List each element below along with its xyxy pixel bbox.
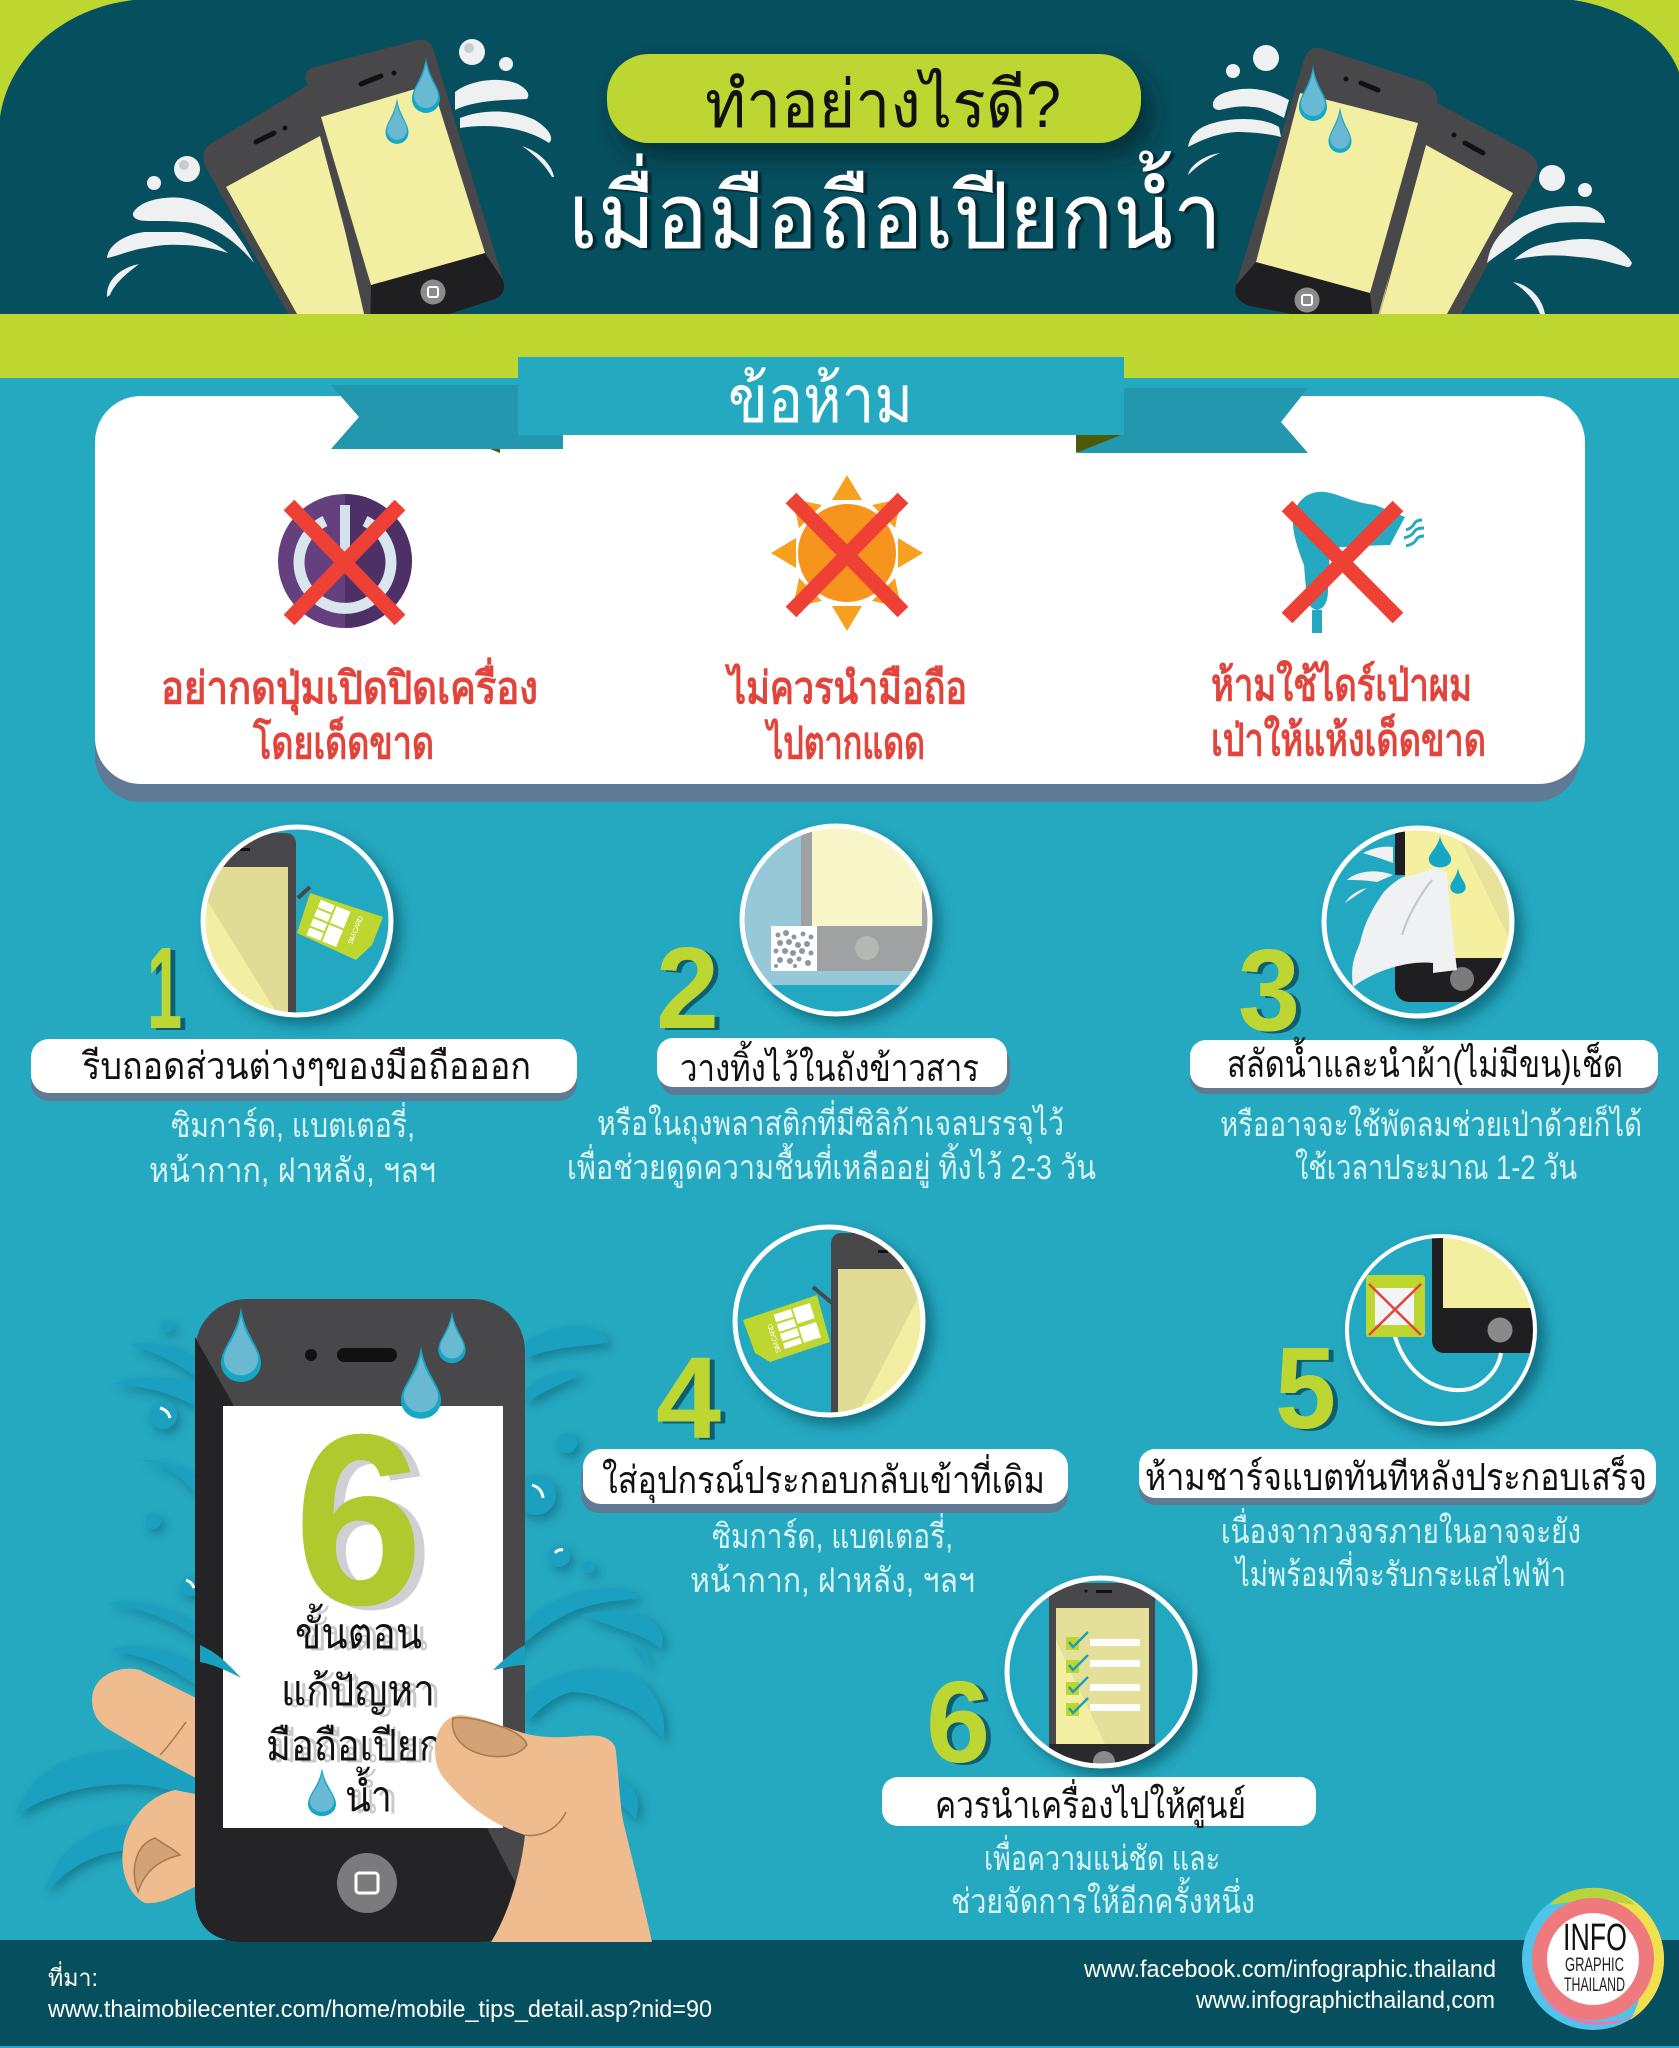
step 2 description: หรือในถุงพลาสติกที่มีซิลิก้าเจลบรรจุไว้ bbox=[597, 1100, 1064, 1144]
step 5 description: ไม่พร้อมที่จะรับกระแสไฟฟ้า bbox=[1234, 1551, 1566, 1594]
step 3 illustration bbox=[1322, 820, 1520, 1018]
logo: THAILAND bbox=[1564, 1975, 1625, 1996]
step 4 bbox=[581, 1225, 1068, 1600]
icon: hair dryer crossed bbox=[1287, 492, 1424, 633]
pill: title question: ทำอย่างไรดี? bbox=[705, 67, 1061, 141]
warning text: power: อย่ากดปุ่มเปิดปิดเครื่อง bbox=[161, 657, 538, 716]
source credit bbox=[47, 1961, 712, 2023]
warning text: dryer: เป่าให้แห้งเด็ดขาด bbox=[1211, 713, 1486, 765]
warning text: dryer bbox=[1211, 659, 1486, 765]
step 3 label bbox=[1190, 1036, 1658, 1094]
source credit: www.thaimobilecenter.com/home/mobile_tips_detail.asp?nid=90 bbox=[47, 1996, 712, 2023]
step 2 number: 2 bbox=[656, 923, 719, 1053]
warning text: sun bbox=[725, 662, 967, 768]
thumb and palm bbox=[435, 1715, 652, 1942]
big number six: 6 bbox=[294, 1383, 423, 1656]
step 5 description bbox=[1221, 1508, 1581, 1594]
step 6 number: 6 bbox=[926, 1657, 990, 1787]
step 1 label bbox=[31, 1039, 577, 1101]
source credit: ที่มา: bbox=[48, 1961, 98, 1992]
step 6 description: ช่วยจัดการให้อีกครั้งหนึ่ง bbox=[951, 1877, 1255, 1921]
step 4 description: ซิมการ์ด, แบตเตอรี่, bbox=[712, 1513, 953, 1556]
logo bbox=[1522, 1888, 1664, 2030]
step 1 number: 1 bbox=[147, 923, 182, 1053]
icon: small drop bbox=[308, 1768, 336, 1816]
illustration: phone in hand with splash bbox=[16, 1299, 664, 1942]
warning text: power: โดยเด็ดขาด bbox=[252, 716, 434, 768]
pill: title question bbox=[607, 54, 1141, 143]
step 1 description: หน้ากาก, ฝาหลัง, ฯลฯ bbox=[149, 1152, 436, 1190]
splash tips on screen bbox=[200, 1645, 525, 1678]
step 1 illustration: SIM CARD bbox=[347, 915, 365, 946]
step 6 illustration bbox=[1005, 1576, 1197, 1784]
ribbon: section heading: ข้อห้าม bbox=[728, 362, 913, 436]
step 5 illustration bbox=[1345, 1225, 1543, 1426]
footer band bbox=[0, 1940, 1679, 2046]
website links bbox=[1083, 1956, 1496, 2014]
step 6 description: เพื่อความแน่ชัด และ bbox=[984, 1835, 1220, 1878]
step 6 label: ควรนำเครื่องไปให้ศูนย์ bbox=[935, 1779, 1246, 1828]
step 3 number: 3 bbox=[1238, 925, 1300, 1055]
step 1 description bbox=[149, 1102, 436, 1190]
step 4 illustration: SIM CARD bbox=[767, 1323, 783, 1354]
website links: www.facebook.com/infographic.thailand bbox=[1083, 1956, 1496, 1983]
step 2 description bbox=[567, 1100, 1096, 1188]
phone body bbox=[195, 1299, 525, 1942]
step 5 bbox=[1139, 1225, 1656, 1594]
step 1 illustration bbox=[180, 825, 393, 1033]
phone screen text: มือถือเปียก bbox=[266, 1722, 442, 1769]
step 5 description: เนื่องจากวงจรภายในอาจจะยัง bbox=[1221, 1508, 1581, 1551]
header band bbox=[0, 0, 1679, 381]
warning text: sun: ไปตากแดด bbox=[764, 717, 925, 768]
phone screen text: ขั้นตอน bbox=[295, 1603, 422, 1657]
phone screen text: แก้ปัญหา bbox=[281, 1667, 435, 1715]
icon: sun crossed bbox=[771, 475, 923, 631]
logo: INFO bbox=[1563, 1917, 1627, 1959]
title: เมื่อมือถือเปียกน้ำ bbox=[568, 150, 1222, 268]
step 2 description: เพื่อช่วยดูดความชื้นที่เหลืออยู่ ทิ้งไว้ 2-3 วัน bbox=[567, 1143, 1096, 1188]
step 2 illustration bbox=[735, 820, 945, 1016]
step 6 description bbox=[951, 1835, 1255, 1921]
phone screen text bbox=[266, 1603, 442, 1820]
water splashes bbox=[16, 1320, 664, 1893]
icon: power button crossed bbox=[278, 494, 412, 628]
step 1 label: รีบถอดส่วนต่างๆของมือถือออก bbox=[81, 1046, 531, 1088]
step 2 label bbox=[657, 1038, 1010, 1095]
warning text: sun: ไม่ควรนำมือถือ bbox=[725, 662, 967, 713]
step 4 illustration bbox=[733, 1225, 941, 1433]
drops on phone bbox=[221, 1307, 466, 1419]
panel: prohibitions bbox=[95, 357, 1585, 802]
website links: www.infographicthailand,com bbox=[1195, 1987, 1495, 2014]
step 3 bbox=[1190, 820, 1658, 1187]
step 6 bbox=[882, 1576, 1316, 1921]
step 2 bbox=[567, 820, 1096, 1188]
step 3 description bbox=[1220, 1104, 1642, 1187]
step 1 description: ซิมการ์ด, แบตเตอรี่, bbox=[171, 1102, 415, 1145]
step 2 label: วางทิ้งไว้ในถังข้าวสาร bbox=[680, 1040, 979, 1090]
warning text: dryer: ห้ามใช้ไดร์เป่าผม bbox=[1211, 659, 1472, 710]
logo: GRAPHIC bbox=[1565, 1955, 1624, 1976]
illustration: wet phones right bbox=[1188, 45, 1632, 340]
illustration: wet phones left bbox=[106, 39, 554, 314]
phone screen text: น้ำ bbox=[345, 1766, 392, 1820]
step 1 bbox=[31, 825, 577, 1190]
step 4 label: ใส่อุปกรณ์ประกอบกลับเข้าที่เดิม bbox=[602, 1454, 1045, 1503]
step 4 label bbox=[581, 1449, 1068, 1513]
fingers bbox=[92, 1669, 200, 1903]
step 4 number: 4 bbox=[656, 1333, 721, 1463]
step 5 number: 5 bbox=[1275, 1323, 1336, 1453]
ribbon: section heading bbox=[331, 357, 1308, 453]
step 4 description: หน้ากาก, ฝาหลัง, ฯลฯ bbox=[690, 1562, 975, 1600]
step 3 description: ใช้เวลาประมาณ 1-2 วัน bbox=[1295, 1148, 1577, 1187]
step 4 description bbox=[690, 1513, 975, 1600]
warning text: power bbox=[161, 657, 538, 768]
